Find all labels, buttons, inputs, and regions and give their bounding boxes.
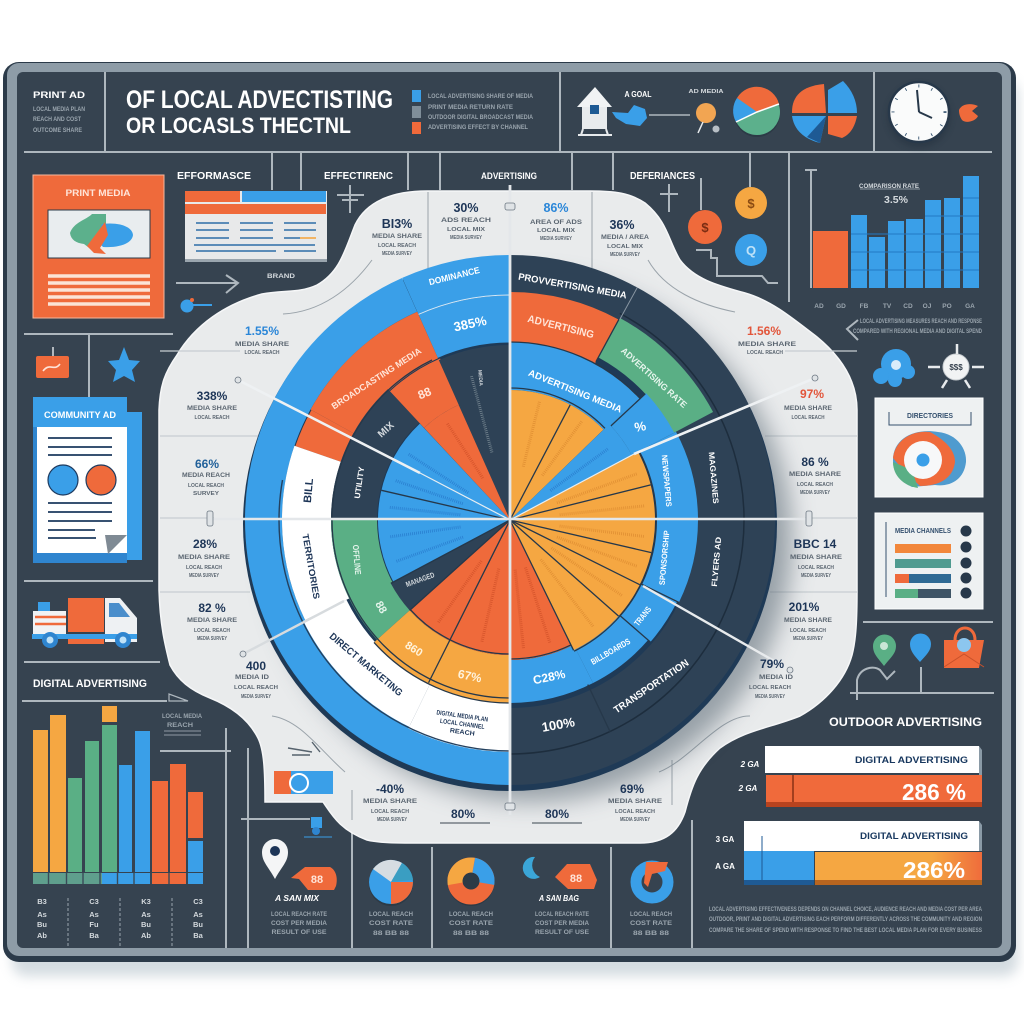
stat: 97%: MEDIA SHARE [784,405,833,412]
panel: outdoor progress bar: 2 GA [740,760,760,769]
text block: bottom 4 [535,894,590,936]
wedge comb textures [389,375,645,649]
stat: 80% left: 80% [451,807,475,821]
icon: crosshair right [660,184,678,212]
ring labels: TRANS [632,604,653,628]
legend: LOCAL ADVERTISING SHARE OF MEDIA [428,94,534,100]
bar chart: top right: GA [965,303,975,310]
ring labels: % [633,418,648,435]
text block: bottom 1: LOCAL REACH RATE [271,912,327,918]
stat: 81%: MEDIA SHARE [372,233,423,240]
text block: bottom 2: LOCAL REACH [369,912,413,918]
stat: 201%: 201% [789,600,820,614]
icon: orange sign [36,347,69,378]
icon: map blob [70,214,133,254]
icon: blue badge: Q [746,243,756,258]
bar chart: bottom left [33,706,203,884]
stat: 81% [372,217,423,257]
text block: bottom 4: COST PER MEDIA [535,921,590,927]
icon: blue map pin [910,634,931,662]
stat: 30%: LOCAL MIX [447,227,485,233]
icon: blue bottle [304,817,332,837]
radial separators [381,288,679,732]
icon: orange badge: $ [701,220,709,235]
stat: 1.56% red [738,324,797,356]
stat: 86% right: 86 % [801,455,829,469]
text block: bottom 1: A SAN MIX [274,894,320,903]
small triangle marker [169,694,188,701]
stat: 69% [608,782,663,823]
ring labels: C28% [532,667,567,687]
legend: ADVERTISING EFFECT BY CHANNEL [428,125,528,131]
stat: 81%: MEDIA SURVEY [382,251,412,257]
section labels [177,170,695,182]
pie shadow [268,278,792,802]
stat: 66%: SURVEY [193,491,219,497]
note with arrow: COMPARED WITH REGIONAL MEDIA AND DIGITAL SPEND [853,329,983,335]
ring labels: MIX [376,420,397,440]
header note block: REACH AND COST [33,116,81,123]
bar chart: top right: COMPARISON RATE [859,184,919,190]
panel: outdoor progress bar: 2 GA [738,784,758,793]
stat: 82%: MEDIA SURVEY [197,636,227,642]
stat: 1.56% red: LOCAL REACH [747,350,783,356]
bar chart axis labels: Ab [141,931,151,940]
stat: 79% [749,657,793,700]
bar chart: top right: TV [883,303,892,310]
heading: digital advertising: DIGITAL ADVERTISING [33,678,147,690]
stat: 69%: MEDIA SURVEY [620,817,650,823]
stat: 201%: MEDIA SHARE [784,617,833,624]
ring labels: 67% [457,667,483,685]
bar chart: top right: CD [903,303,913,310]
header note block [33,90,85,134]
icon: gear figure: $$$ [949,363,963,372]
stat: 40%: MEDIA SURVEY [377,817,407,823]
panel: donut card: DIRECTORIES [907,413,953,420]
stat: 338%: LOCAL REACH [194,415,230,421]
icon: donut [448,860,494,906]
bar chart: top right: AD [814,303,824,310]
section labels: EFFORMASCE [177,170,251,182]
bar chart axis labels: K3 [141,897,151,906]
panel: digital progress bar [715,821,982,885]
stat: 80% left [440,807,490,823]
middle ring segments right [229,239,791,801]
ring labels: DIRECT MARKETING [327,631,405,699]
panel: document card [33,397,142,563]
caption: BRAND [267,274,296,280]
panel: effectiveness form [185,191,327,262]
stat: 40%: MEDIA SHARE [363,798,418,805]
stat: 86% right: MEDIA SHARE [789,471,842,478]
stat: 28%: MEDIA SHARE [178,554,231,561]
stat: 79%: 79% [760,657,784,671]
icon: green pin [873,634,896,666]
arrow [176,275,238,293]
stat: 66% [182,457,230,497]
bar chart axis labels: Bu [141,920,151,929]
stat: 40% [363,782,418,823]
panel: donut card [875,398,983,497]
text block: bottom 5 [630,912,672,937]
ring labels: BILL [302,478,316,503]
text block: bottom right paragraph [709,907,983,934]
stat: 36%: MEDIA / AREA [601,234,649,241]
inner wedges left [394,404,626,636]
stat: 69%: 69% [620,782,644,796]
stat: upper left blue: 1.55% [245,324,279,338]
stat: 66%: 66% [195,457,219,471]
ring labels: 88 [416,384,434,402]
bar chart axis labels: C3 [193,897,203,906]
stat: 69%: LOCAL REACH [615,809,655,815]
panel: table card: MEDIA CHANNELS [895,528,951,535]
text block: bottom 3 [449,912,493,937]
bar chart axis labels: C3 [89,897,99,906]
stat: 82%: LOCAL REACH [194,628,230,634]
icon: yellow badge: $ [747,196,755,211]
bar chart axis labels: As [141,910,151,919]
legend: OUTDOOR DIGITAL BROADCAST MEDIA [428,115,534,121]
text block: bottom 1: COST PER MEDIA [271,921,328,927]
panel: outdoor progress bar: 286 % [902,779,966,805]
stat: 338%: 338% [197,389,228,403]
chart note: LOCAL MEDIA [162,714,203,720]
stat: 80% right [532,807,582,823]
bar chart: top right: PO [942,303,952,310]
panel: outdoor progress bar [738,746,982,807]
ring labels: MEDIA [476,370,484,387]
stat: 36%: LOCAL MIX [607,244,643,250]
ring labels: MAGAZINES [707,451,720,505]
stat: 1.56% red: MEDIA SHARE [738,341,797,348]
icon: crescent [523,857,540,879]
stat: BBC 14: BBC 14 [794,537,837,551]
panel: central light background [159,191,857,843]
chart note: REACH [167,723,193,729]
stat: 80% right: 80% [545,807,569,821]
ring labels: OFFLINE [351,544,363,575]
icon: pointing hand with connector [612,89,724,126]
panel: radial chart [187,197,833,843]
curve and axis [850,667,994,700]
icon: orange circle [86,465,116,495]
stat: 66%: LOCAL REACH [188,483,224,489]
ring labels: LOCAL CHANNEL [439,718,485,731]
ring labels: TRANSPORTATION [612,658,691,716]
bar chart: top right: FB [860,303,869,310]
icon: house [577,87,612,135]
title: OR LOCASLS THECTNL [126,113,351,138]
middle ring segments left [235,245,785,795]
panel: print media card: PRINT MEDIA [66,188,131,199]
stat: 201% [784,600,833,642]
bar chart: top right: OJ [923,303,932,310]
panel: digital progress bar: 286% [903,857,965,883]
icon: blue blob [873,349,915,387]
text block: bottom 2 [369,912,413,937]
stat: upper left blue [235,324,290,356]
stat: 30%: MEDIA SURVEY [450,235,482,241]
panel: print media card [33,175,164,318]
bar chart axis labels: Ba [89,931,100,940]
panel: table card [875,513,983,609]
icon: orange mail [944,628,984,668]
stat: 36%: MEDIA SURVEY [610,252,640,258]
ring labels: 860 [403,640,425,659]
ring labels: TERRITORIES [300,533,322,600]
stat: 86% right: LOCAL REACH [797,482,833,488]
ring labels: SPONSORSHIP [658,529,671,586]
stat: 400 [234,659,278,700]
stat: 30%: ADS REACH [441,217,491,224]
inner wedges right [412,422,608,618]
stat: 36% [601,218,649,258]
stat: 400: 400 [246,659,266,673]
stat: 81%: BI3% [382,217,412,231]
right half dark rings [194,204,826,836]
section labels: ADVERTISING [481,171,537,182]
stat: 28%: LOCAL REACH [186,565,222,571]
ring labels: BILLBOARDS [589,636,632,667]
icon: orange bubble right: 88 [570,873,582,885]
panel: outdoor progress bar: DIGITAL ADVERTISING [855,755,968,766]
line connector [700,178,702,210]
ring labels: BROADCASTING MEDIA [330,345,424,411]
icon: orange pin [696,103,720,133]
stat: 86%: 86% [543,201,569,215]
section labels: EFFECTIRENC [324,170,393,182]
stat: 28%: MEDIA SURVEY [189,573,219,579]
icon: blue badge [735,234,767,266]
icon: crosshair left [337,185,364,213]
icon: location pin [262,839,288,879]
icon: blue swirl [636,862,668,898]
ring labels: NEWSPAPERS [660,454,673,508]
icon: truck [32,598,137,648]
ring labels: REACH [449,727,475,738]
icon: card donut [893,431,966,488]
stat: 97%: 97% [800,387,824,401]
stat: 30% [441,201,491,241]
stat: 40%: -40% [376,782,404,796]
ring labels: 88 [372,599,389,616]
text block: bottom 5: LOCAL REACH [630,912,672,918]
bar chart axis labels: B3 [37,897,47,906]
stat: 28% [178,537,231,579]
icon: pointing hand with connector: AD MEDIA [688,89,724,95]
stat: 201%: MEDIA SURVEY [793,636,823,642]
ring labels: FLYERS AD [710,536,723,587]
bar chart axis labels: Bu [37,920,47,929]
bar chart axis labels: As [193,910,203,919]
stat: 338% [187,389,238,421]
stat: 400: MEDIA ID [235,674,269,681]
ring labels: ADVERTISING MEDIA [527,368,623,416]
stat: BBC 14: MEDIA SURVEY [801,573,831,579]
stat: 66%: MEDIA REACH [182,472,230,479]
stat: BBC 14: MEDIA SHARE [790,554,843,561]
stat: 97% [784,387,833,421]
icon: split map shape [792,81,857,143]
bar chart axis labels: Bu [193,920,203,929]
text block: bottom 2: COST RATE [369,921,413,927]
stat: 97%: LOCAL REACH [792,415,825,421]
ring labels: ADVERTISING RATE [619,346,689,410]
panel: digital progress bar: A GA [715,862,735,871]
icon: orange bubble left [291,867,337,890]
ring labels: MANAGED [405,570,436,589]
stat labels [178,201,843,823]
ring labels: ADVERTISING [526,313,595,341]
icon: yellow badge [735,187,767,219]
ring labels [300,265,723,738]
stat: 400: LOCAL REACH [234,685,278,691]
panel: document card: COMMUNITY AD [44,410,117,420]
text block: bottom 4: LOCAL REACH RATE [535,912,589,918]
ring arc outlines [313,323,707,717]
legend [412,90,534,134]
icon: orange and blue tag [274,742,333,794]
stat: 82% [187,601,238,642]
stat: 86% right [789,455,842,496]
panel: digital progress bar: 3 GA [716,835,735,844]
stat: 30%: 30% [453,201,479,215]
stat: 82%: MEDIA SHARE [187,617,238,624]
stat: 81%: LOCAL REACH [378,243,416,249]
stat: 86% [530,201,583,242]
icon: orange badge [688,210,722,244]
section labels: DEFERIANCES [630,170,695,182]
leader lines through chart [208,185,815,815]
bar chart: top right: 3.5% [884,194,909,206]
ring labels: PROVVERTISING MEDIA [517,272,628,302]
ring labels: DIGITAL MEDIA PLAN [436,709,489,724]
heading: outdoor advertising: OUTDOOR ADVERTISING [829,715,982,729]
text block: bottom 3: LOCAL REACH [449,912,493,918]
title [126,86,393,138]
legend: PRINT MEDIA RETURN RATE [428,105,513,111]
text block: bottom 4: RESULT OF USE [535,930,589,936]
stepped line [696,250,778,283]
text block: bottom 3: 88 BB 88 [453,930,489,937]
stat: 36%: 36% [609,218,635,232]
stat: 28%: 28% [193,537,217,551]
stat: 82%: 82 % [198,601,226,615]
bar chart axis labels [37,897,204,946]
text block: bottom 3: COST RATE [449,921,493,927]
header note block: PRINT AD [33,90,85,101]
icon: pointing hand with connector: A GOAL [624,90,652,99]
left half outer blue ring [187,197,833,843]
stat: BBC 14 [790,537,843,579]
leader knobs [207,203,818,810]
stat: upper left blue: MEDIA SHARE [235,341,290,348]
icon: orange apple [959,104,978,122]
bar chart axis labels: Fu [89,920,99,929]
stat: 40%: LOCAL REACH [371,809,409,815]
stat: 86% right: MEDIA SURVEY [800,490,830,496]
ring labels: UTILITY [353,465,366,499]
bar chart axis labels: As [37,910,47,919]
stat: 86%: MEDIA SURVEY [540,236,572,242]
text block: bottom 5: COST RATE [630,921,672,927]
icon: blue star [108,347,140,382]
bar chart: top right [805,170,979,310]
text block: bottom 1: RESULT OF USE [272,930,326,936]
stat: 86%: AREA OF ADS [530,219,583,226]
stat: BBC 14: LOCAL REACH [798,565,834,571]
bar chart axis labels: Ba [193,931,204,940]
title: OF LOCAL ADVECTISTING [126,86,393,114]
bar chart axis labels: Ab [37,931,47,940]
bar chart: top right: GD [836,303,846,310]
icon: header pie chart [733,87,780,137]
stat: upper left blue: LOCAL REACH [244,350,280,356]
header note block: OUTCOME SHARE [33,127,83,134]
stat: 79%: LOCAL REACH [749,685,791,691]
panel: digital progress bar: DIGITAL ADVERTISING [860,831,968,842]
stat: 338%: MEDIA SHARE [187,405,238,412]
icon: orange bubble right [555,864,597,889]
stat: 201%: LOCAL REACH [790,628,826,634]
stat: 79%: MEDIA ID [759,674,793,681]
text block: bottom 2: 88 BB 88 [373,930,409,937]
text block: bottom 1 [271,894,328,936]
ring labels: DOMINANCE [428,265,481,287]
ring labels: 385% [452,313,488,334]
icon: orange bubble left: 88 [311,874,323,886]
text block: bottom 5: 88 BB 88 [633,930,669,937]
ring labels: 100% [541,714,576,735]
stat: 86%: LOCAL MIX [537,228,575,234]
stat: 400: MEDIA SURVEY [241,694,271,700]
icon: blue knob [180,298,212,312]
note with arrow [847,319,983,340]
bar chart axis labels: As [89,910,99,919]
icon: clock [887,82,951,148]
header note block: LOCAL MEDIA PLAN [33,106,85,113]
stat: 1.56% red: 1.56% [747,324,781,338]
icon: blue circle [48,465,78,495]
chart note [162,714,203,735]
stat: 69%: MEDIA SHARE [608,798,663,805]
icon: small pie [369,860,413,906]
text block: bottom 4: A SAN BAG [538,894,579,903]
icon: gear figure [928,344,984,388]
stat: 79%: MEDIA SURVEY [755,694,785,700]
